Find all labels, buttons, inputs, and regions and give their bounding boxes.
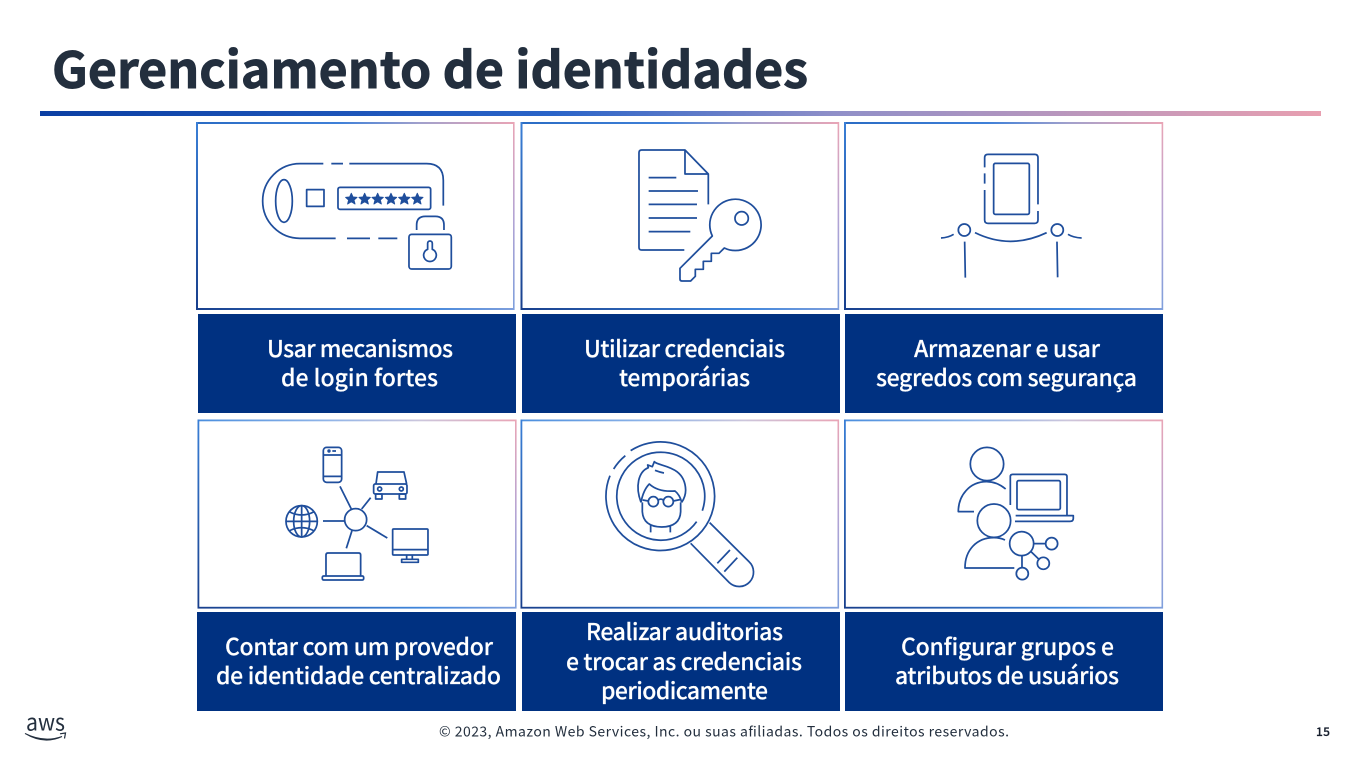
panel: groups and attributes <box>844 420 1163 711</box>
banner: groups and attributes <box>845 612 1163 711</box>
banner: identity provider: de identidade centralizado <box>216 657 501 691</box>
panel: audits <box>520 420 840 711</box>
banner: identity provider <box>197 612 516 711</box>
frame: temporary credentials <box>520 122 839 310</box>
panel: identity provider <box>197 420 517 711</box>
panel: temporary credentials <box>520 122 840 413</box>
banner: temporary credentials: Utilizar credenciais <box>584 330 785 364</box>
frame: strong sign-in <box>196 122 515 310</box>
banner: strong sign-in <box>198 314 516 413</box>
frame: audits <box>520 420 839 609</box>
panel: secrets <box>844 122 1163 413</box>
icon: connected devices hub <box>286 447 428 580</box>
icon: document and key <box>639 150 761 281</box>
banner: audits <box>522 612 840 711</box>
page number: 15 <box>1316 723 1330 740</box>
icon: magnifying glass over person <box>606 442 754 587</box>
banner: secrets: segredos com segurança <box>876 359 1137 393</box>
frame: groups and attributes <box>844 420 1163 609</box>
banner: strong sign-in: de login fortes <box>281 359 438 393</box>
aws logo: aws <box>26 704 65 738</box>
banner: audits: e trocar as credenciais <box>566 643 802 677</box>
title rule <box>40 111 1321 116</box>
icon: login card with padlock <box>263 164 451 269</box>
panel: strong sign-in <box>196 122 516 413</box>
banner: secrets <box>845 314 1163 413</box>
banner: temporary credentials <box>522 314 840 413</box>
title: Gerenciamento de identidades <box>52 31 808 103</box>
banner: groups and attributes: atributos de usuários <box>895 657 1119 691</box>
banner: temporary credentials: temporárias <box>619 359 750 393</box>
copyright footer: © 2023, Amazon Web Services, Inc. ou suas afiliadas. Todos os direitos reservados. <box>439 722 1009 742</box>
banner: audits: periodicamente <box>601 672 768 706</box>
frame: identity provider <box>198 420 517 609</box>
banner: strong sign-in: Usar mecanismos <box>267 330 453 364</box>
banner: groups and attributes: Configurar grupos e <box>901 628 1114 662</box>
banner: audits: Realizar auditorias <box>586 613 783 647</box>
icon: users, laptop and attributes <box>958 447 1073 580</box>
banner: secrets: Armazenar e usar <box>914 330 1101 364</box>
banner: identity provider: Contar com um provedor <box>225 628 494 662</box>
icon: protected frame behind rope <box>941 154 1082 278</box>
frame: secrets <box>844 122 1163 310</box>
